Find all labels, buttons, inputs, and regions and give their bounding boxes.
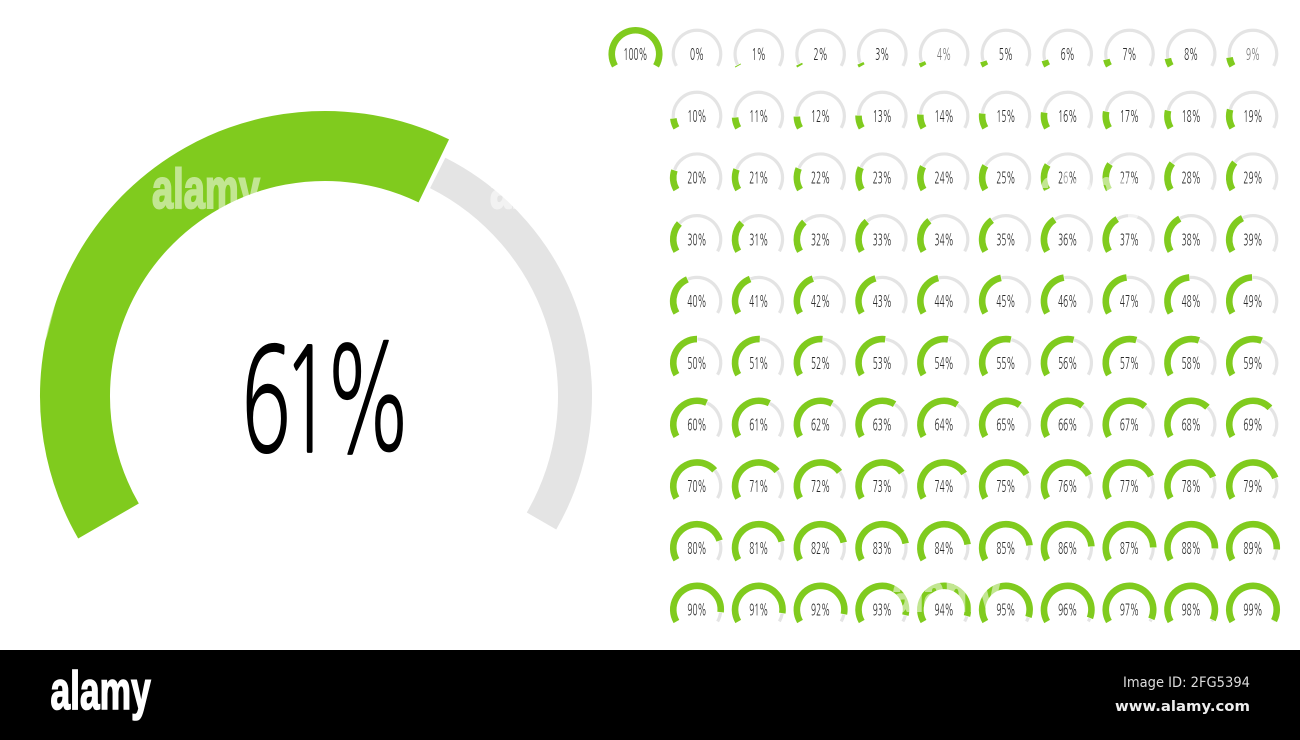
gauge 96% xyxy=(1044,586,1091,621)
gauge 61% xyxy=(735,401,783,436)
gauge 15% xyxy=(982,92,1030,128)
gauge 78%: 78% xyxy=(1182,478,1201,495)
gauge 38% xyxy=(1167,216,1215,251)
gauge 6%: 6% xyxy=(1061,46,1075,63)
gauge 79%: 79% xyxy=(1243,478,1263,495)
gauge 95%: 95% xyxy=(996,602,1015,618)
gauge 50%: 50% xyxy=(687,355,707,371)
gauge 77% xyxy=(1106,462,1153,498)
gauge 24% xyxy=(920,154,968,190)
gauge 99% xyxy=(1229,586,1277,621)
gauge 93%: 93% xyxy=(873,602,892,618)
gauge 94%: 94% xyxy=(935,602,954,618)
gauge 55%: 55% xyxy=(996,355,1015,371)
gauge 60%: 60% xyxy=(687,417,707,433)
gauge 94% xyxy=(920,586,968,621)
gauge 67% xyxy=(1106,401,1153,436)
gauge 1% xyxy=(735,30,783,66)
gauge 51%: 51% xyxy=(749,355,768,371)
gauge 34%: 34% xyxy=(935,232,954,248)
gauge 40% xyxy=(673,277,721,313)
gauge 82%: 82% xyxy=(811,540,830,556)
gauge 71% xyxy=(735,462,783,498)
gauge 24%: 24% xyxy=(935,170,954,186)
gauge 25%: 25% xyxy=(996,170,1015,186)
gauge 89% xyxy=(1229,524,1277,560)
gauge 54% xyxy=(920,339,968,375)
gauge 46%: 46% xyxy=(1058,293,1077,310)
gauge 5%: 5% xyxy=(999,46,1013,63)
gauge 1%: 1% xyxy=(752,46,766,63)
gauge 50% xyxy=(673,339,721,375)
gauge 98% xyxy=(1167,586,1215,621)
gauge 71%: 71% xyxy=(749,478,768,495)
gauge 83%: 83% xyxy=(873,540,892,556)
watermark overlays: alamy xyxy=(490,159,598,221)
gauge 81% xyxy=(735,524,783,560)
gauge 69%: 69% xyxy=(1243,417,1263,433)
gauge 20%: 20% xyxy=(687,170,707,186)
gauge 8%: 8% xyxy=(1184,46,1198,63)
gauge 76% xyxy=(1044,462,1091,498)
gauge 33% xyxy=(859,216,906,251)
gauge 12% xyxy=(797,92,844,128)
gauge 54%: 54% xyxy=(935,355,954,371)
gauge 20% xyxy=(673,154,721,190)
gauge 4% xyxy=(920,30,968,66)
gauge 75%: 75% xyxy=(996,478,1015,495)
gauge 8% xyxy=(1167,30,1215,66)
gauge 32%: 32% xyxy=(811,232,830,248)
gauge 2% xyxy=(797,30,844,66)
gauge 61%: 61% xyxy=(749,417,768,433)
gauge 48%: 48% xyxy=(1182,293,1201,310)
gauge 51% xyxy=(735,339,783,375)
gauge 56%: 56% xyxy=(1058,355,1077,371)
gauge 9%: 9% xyxy=(1246,46,1260,63)
gauge 34% xyxy=(920,216,968,251)
gauge 39%: 39% xyxy=(1243,232,1263,248)
gauge 58%: 58% xyxy=(1182,355,1201,371)
gauge 53%: 53% xyxy=(873,355,892,371)
gauge 100% xyxy=(612,30,659,66)
gauge 32% xyxy=(797,216,844,251)
gauge 56% xyxy=(1044,339,1091,375)
gauge 69% xyxy=(1229,401,1277,436)
gauge 26%: 26% xyxy=(1058,170,1077,186)
gauge 18% xyxy=(1167,92,1215,128)
gauge 29%: 29% xyxy=(1243,170,1263,186)
footer bar xyxy=(0,650,1300,740)
gauge 15%: 15% xyxy=(996,108,1015,125)
gauge 49% xyxy=(1229,277,1277,313)
gauge 38%: 38% xyxy=(1182,232,1201,248)
gauge 25% xyxy=(982,154,1030,190)
gauge 37%: 37% xyxy=(1120,232,1139,248)
gauge 43%: 43% xyxy=(873,293,892,310)
gauge 48% xyxy=(1167,277,1215,313)
gauge 65%: 65% xyxy=(996,417,1015,433)
gauge 6% xyxy=(1044,30,1091,66)
gauge 96%: 96% xyxy=(1058,602,1077,618)
gauge 27%: 27% xyxy=(1120,170,1139,186)
gauge 30%: 30% xyxy=(687,232,707,248)
gauge 55% xyxy=(982,339,1030,375)
website: www.alamy.com xyxy=(1115,699,1250,715)
gauge 70% xyxy=(673,462,721,498)
gauge 66%: 66% xyxy=(1058,417,1077,433)
gauge 35% xyxy=(982,216,1030,251)
gauge 44%: 44% xyxy=(935,293,954,310)
image id: Image ID: 2FG5394 xyxy=(1123,675,1250,691)
gauge 10% xyxy=(673,92,721,128)
gauge 35%: 35% xyxy=(996,232,1015,248)
gauge 82% xyxy=(797,524,844,560)
gauge 0% xyxy=(673,30,721,66)
gauge 80%: 80% xyxy=(687,540,707,556)
gauge 92% xyxy=(797,586,844,621)
gauge 16% xyxy=(1044,92,1091,128)
gauge 21%: 21% xyxy=(749,170,768,186)
gauge 46% xyxy=(1044,277,1091,313)
gauge 33%: 33% xyxy=(873,232,892,248)
gauge 49%: 49% xyxy=(1243,293,1263,310)
gauge 67%: 67% xyxy=(1120,417,1139,433)
gauge 36%: 36% xyxy=(1058,232,1077,248)
gauge 84% xyxy=(920,524,968,560)
gauge 42% xyxy=(797,277,844,313)
gauge 26% xyxy=(1044,154,1091,190)
gauge 63%: 63% xyxy=(873,417,892,433)
large gauge value: 61% xyxy=(241,328,413,475)
gauge 22% xyxy=(797,154,844,190)
gauge 40%: 40% xyxy=(687,293,707,310)
gauge 45% xyxy=(982,277,1030,313)
gauge 19%: 19% xyxy=(1243,108,1263,125)
gauge 4%: 4% xyxy=(937,46,951,63)
gauge 36% xyxy=(1044,216,1091,251)
gauge 76%: 76% xyxy=(1058,478,1077,495)
gauge 47% xyxy=(1106,277,1153,313)
gauge 58% xyxy=(1167,339,1215,375)
gauge 81%: 81% xyxy=(749,540,768,556)
gauge 3%: 3% xyxy=(875,46,889,63)
gauge 5% xyxy=(982,30,1030,66)
gauge 62% xyxy=(797,401,844,436)
gauge 0%: 0% xyxy=(690,46,704,63)
gauge 44% xyxy=(920,277,968,313)
gauge 95% xyxy=(982,586,1030,621)
gauge 90% xyxy=(673,586,721,621)
gauge 21% xyxy=(735,154,783,190)
gauge 80% xyxy=(673,524,721,560)
grid of small percentage gauges xyxy=(612,30,1277,621)
gauge 87% xyxy=(1106,524,1153,560)
gauge 41%: 41% xyxy=(749,293,768,310)
gauge 23%: 23% xyxy=(873,170,892,186)
gauge 97%: 97% xyxy=(1120,602,1139,618)
gauge 2%: 2% xyxy=(814,46,828,63)
gauge 100%: 100% xyxy=(623,46,648,63)
gauge 97% xyxy=(1106,586,1153,621)
gauge 52%: 52% xyxy=(811,355,830,371)
gauge 91%: 91% xyxy=(749,602,768,618)
gauge 63% xyxy=(859,401,906,436)
gauge 9% xyxy=(1229,30,1277,66)
gauge 86% xyxy=(1044,524,1091,560)
gauge 77%: 77% xyxy=(1120,478,1139,495)
gauge 91% xyxy=(735,586,783,621)
gauge 31% xyxy=(735,216,783,251)
gauge 17% xyxy=(1106,92,1153,128)
gauge 99%: 99% xyxy=(1243,602,1263,618)
gauge 13%: 13% xyxy=(873,108,892,125)
gauge 7%: 7% xyxy=(1122,46,1137,63)
gauge 57% xyxy=(1106,339,1153,375)
large gauge track xyxy=(438,173,575,521)
gauge 72% xyxy=(797,462,844,498)
gauge 31%: 31% xyxy=(749,232,768,248)
gauge 27% xyxy=(1106,154,1153,190)
gauge 66% xyxy=(1044,401,1091,436)
gauge 59%: 59% xyxy=(1243,355,1263,371)
gauge 84%: 84% xyxy=(935,540,954,556)
gauge 93% xyxy=(859,586,906,621)
gauge 29% xyxy=(1229,154,1277,190)
gauge 17%: 17% xyxy=(1120,108,1139,125)
gauge 85%: 85% xyxy=(996,540,1015,556)
gauge 73%: 73% xyxy=(873,478,892,495)
large gauge green arc xyxy=(75,146,434,521)
gauge 10%: 10% xyxy=(687,108,707,125)
watermark overlays: alamy xyxy=(152,159,260,221)
gauge 14% xyxy=(920,92,968,128)
gauge 43% xyxy=(859,277,906,313)
gauge 57%: 57% xyxy=(1120,355,1139,371)
gauge 19% xyxy=(1229,92,1277,128)
gauge 62%: 62% xyxy=(811,417,830,433)
gauge 68% xyxy=(1167,401,1215,436)
gauge 22%: 22% xyxy=(811,170,830,186)
gauge 42%: 42% xyxy=(811,293,830,310)
footer logo: alamy xyxy=(50,660,151,721)
gauge 13% xyxy=(859,92,906,128)
gauge 75% xyxy=(982,462,1030,498)
gauge 11% xyxy=(735,92,783,128)
gauge 85% xyxy=(982,524,1030,560)
large gauge 61% xyxy=(75,146,575,521)
gauge 72%: 72% xyxy=(811,478,830,495)
watermark overlays: alamy xyxy=(1040,159,1148,221)
gauge 52% xyxy=(797,339,844,375)
gauge 28%: 28% xyxy=(1182,170,1201,186)
gauge 74% xyxy=(920,462,968,498)
gauge 39% xyxy=(1229,216,1277,251)
gauge 74%: 74% xyxy=(935,478,954,495)
gauge 37% xyxy=(1106,216,1153,251)
gauge 65% xyxy=(982,401,1030,436)
watermark overlays xyxy=(0,159,1148,625)
gauge 14%: 14% xyxy=(935,108,954,125)
gauge 16%: 16% xyxy=(1058,108,1077,125)
gauge 47%: 47% xyxy=(1120,293,1139,310)
gauge 45%: 45% xyxy=(996,293,1015,310)
gauge 64%: 64% xyxy=(935,417,954,433)
gauge 60% xyxy=(673,401,721,436)
gauge 70%: 70% xyxy=(687,478,707,495)
watermark overlays: alamy xyxy=(892,563,1000,625)
gauge 88% xyxy=(1167,524,1215,560)
gauge 79% xyxy=(1229,462,1277,498)
gauge 98%: 98% xyxy=(1182,602,1201,618)
gauge 23% xyxy=(859,154,906,190)
gauge 83% xyxy=(859,524,906,560)
gauge 86%: 86% xyxy=(1058,540,1077,556)
gauge 53% xyxy=(859,339,906,375)
gauge 87%: 87% xyxy=(1120,540,1139,556)
gauge 88%: 88% xyxy=(1182,540,1201,556)
gauge 89%: 89% xyxy=(1243,540,1263,556)
gauge 68%: 68% xyxy=(1182,417,1201,433)
gauge 78% xyxy=(1167,462,1215,498)
gauge 7% xyxy=(1106,30,1153,66)
gauge 90%: 90% xyxy=(687,602,707,618)
gauge 18%: 18% xyxy=(1182,108,1201,125)
gauge 41% xyxy=(735,277,783,313)
gauge 3% xyxy=(859,30,906,66)
gauge 12%: 12% xyxy=(811,108,830,125)
gauge 92%: 92% xyxy=(811,602,830,618)
gauge 11%: 11% xyxy=(749,108,768,125)
gauge 30% xyxy=(673,216,721,251)
gauge 64% xyxy=(920,401,968,436)
gauge 73% xyxy=(859,462,906,498)
gauge 59% xyxy=(1229,339,1277,375)
gauge 28% xyxy=(1167,154,1215,190)
